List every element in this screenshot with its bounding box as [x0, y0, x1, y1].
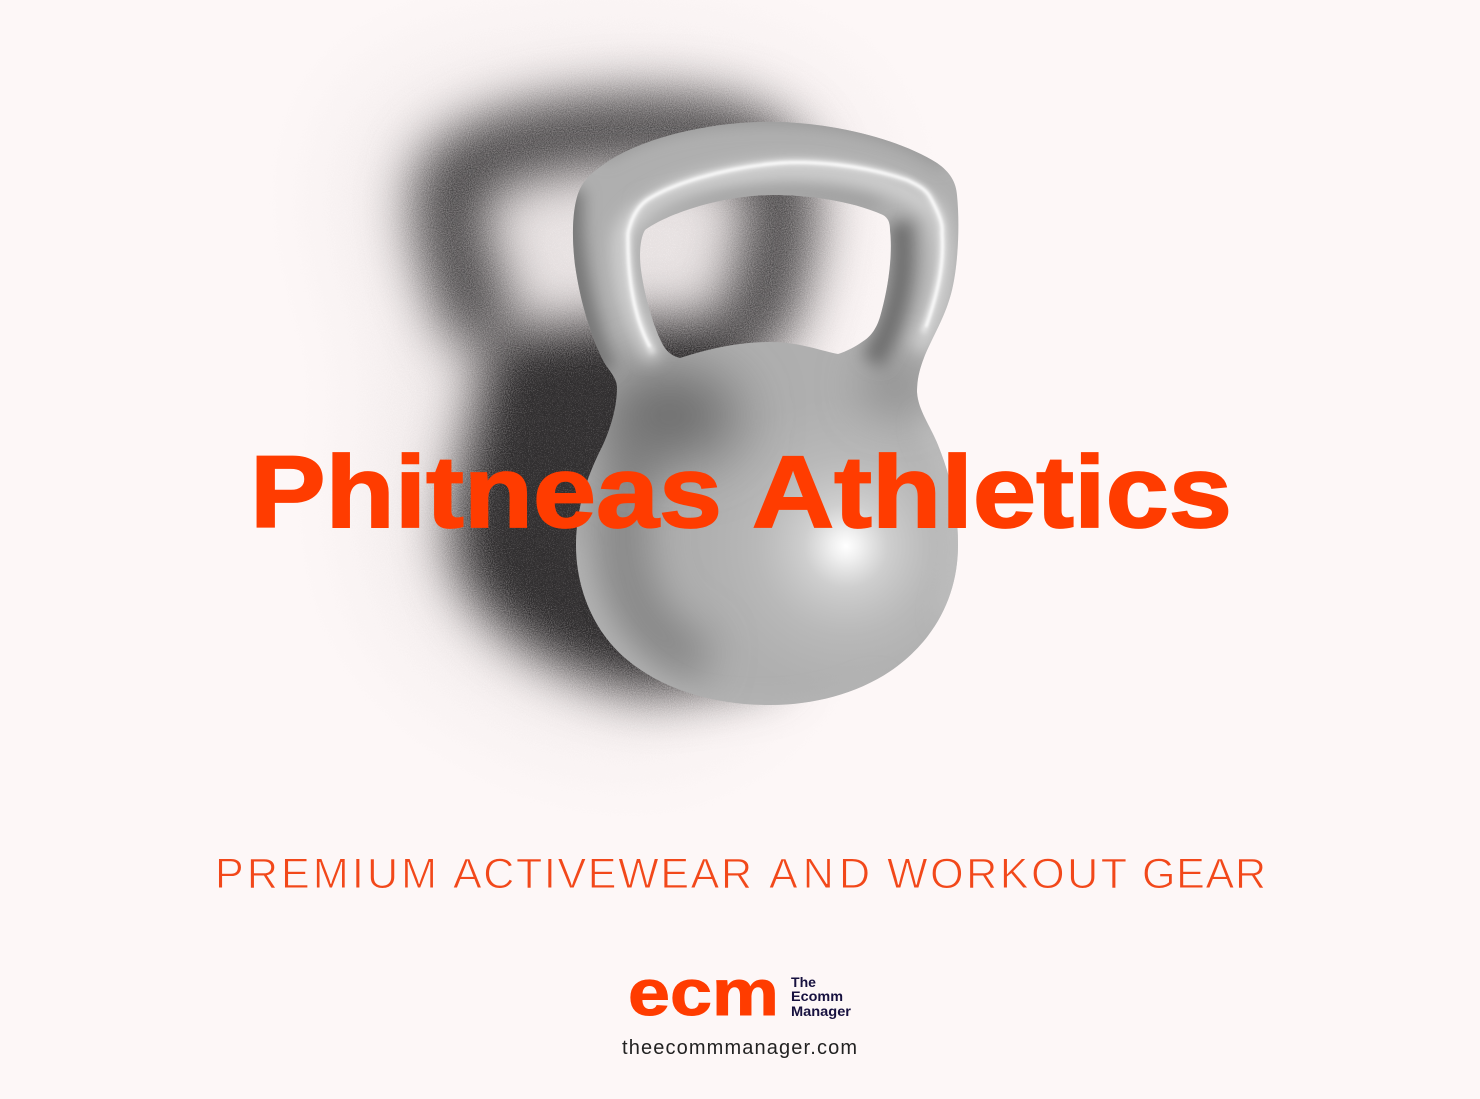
logo name: The [791, 975, 816, 990]
subtitle: ACTIVEWEAR [453, 850, 752, 898]
subtitle: AND [769, 850, 870, 898]
subtitle [215, 850, 1266, 898]
title: Athletics [752, 435, 1232, 549]
website: theecommmanager.com [622, 1037, 857, 1059]
kettlebell metal [572, 122, 958, 705]
logo name: Manager [791, 1004, 852, 1019]
logo: ecm [628, 956, 852, 1029]
logo wordmark: ecm [628, 956, 779, 1029]
subtitle: WORKOUT [887, 850, 1127, 898]
title: Phitneas [250, 435, 722, 549]
logo name: Ecomm [791, 989, 843, 1004]
kettlebell shadow [371, 71, 838, 720]
body shading [576, 345, 958, 686]
subtitle: PREMIUM [215, 850, 437, 898]
logo name [791, 975, 852, 1019]
subtitle: GEAR [1142, 850, 1266, 898]
title [250, 435, 1232, 549]
handle shading [571, 116, 945, 372]
illustration: kettlebell with shadow [371, 71, 990, 720]
handle highlight [628, 162, 942, 353]
